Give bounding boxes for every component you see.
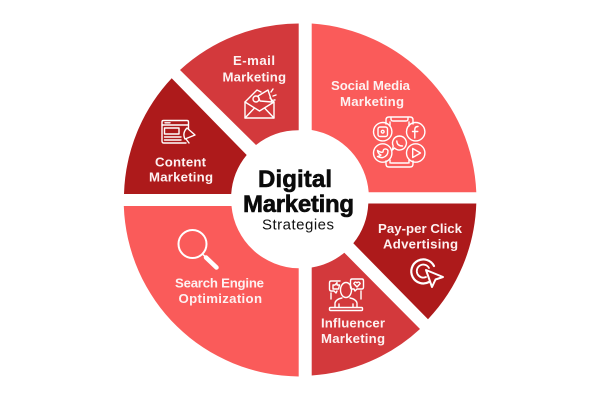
panel: pay-per click advertising [353, 204, 476, 319]
segment: influencer [312, 253, 420, 376]
icon: browser window with megaphone [162, 120, 195, 143]
icon: influencer with reactions [330, 279, 364, 310]
label: e-mail marketing: Marketing [222, 70, 286, 84]
label: content marketing [149, 154, 213, 184]
center title [243, 166, 354, 234]
panel: content marketing [124, 78, 247, 194]
icon: magnifying glass [178, 230, 216, 268]
label: search engine optimization: Optimization [178, 291, 262, 306]
segment: social media [312, 24, 476, 192]
label: search engine optimization [175, 276, 264, 306]
segment: search engine [124, 206, 299, 376]
segment: content [124, 78, 247, 194]
label: pay-per click advertising: Pay-per Click [378, 221, 463, 236]
label: e-mail marketing [222, 53, 286, 84]
label: content marketing: Marketing [149, 170, 213, 184]
label: pay-per click advertising: Advertising [383, 236, 458, 252]
label: content marketing: Content [155, 154, 207, 170]
panel: search engine optimization [124, 206, 299, 376]
label: influencer marketing: Influencer [321, 316, 385, 330]
panel: e-mail marketing [180, 24, 299, 145]
label: social media marketing: Marketing [340, 94, 404, 109]
label: e-mail marketing: E-mail [233, 53, 275, 68]
segment: pay-per click [353, 204, 476, 319]
heading: digital marketing: Digital [258, 166, 332, 193]
heading: digital marketing: Marketing [243, 191, 354, 218]
icon: phone with social networks [374, 117, 425, 167]
heading: digital marketing [243, 166, 354, 218]
panel: influencer marketing [312, 253, 420, 376]
segment: e-mail [180, 24, 299, 145]
panel: social media marketing [312, 24, 476, 192]
label: social media marketing [331, 78, 411, 109]
label: pay-per click advertising [378, 221, 463, 252]
label: influencer marketing: Marketing [321, 331, 385, 346]
label: search engine optimization: Search Engine [175, 276, 264, 290]
label: influencer marketing [321, 316, 385, 346]
subheading: strategies: Strategies [262, 216, 334, 234]
icon: envelope with megaphone [245, 89, 276, 118]
label: social media marketing: Social Media [331, 78, 411, 93]
icon: target with cursor [411, 259, 443, 287]
